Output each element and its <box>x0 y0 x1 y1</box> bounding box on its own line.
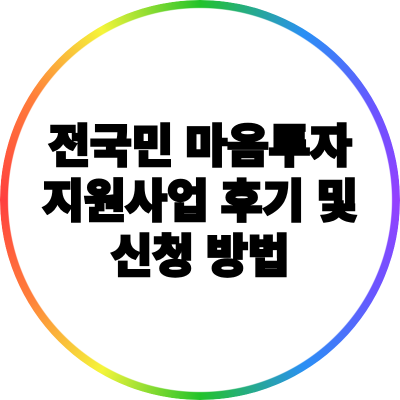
title line 3: 신청 방법 <box>111 231 289 282</box>
title line 2: 지원사업 후기 및 <box>42 176 358 227</box>
title line 1: 전국민 마음투자 <box>48 121 352 172</box>
